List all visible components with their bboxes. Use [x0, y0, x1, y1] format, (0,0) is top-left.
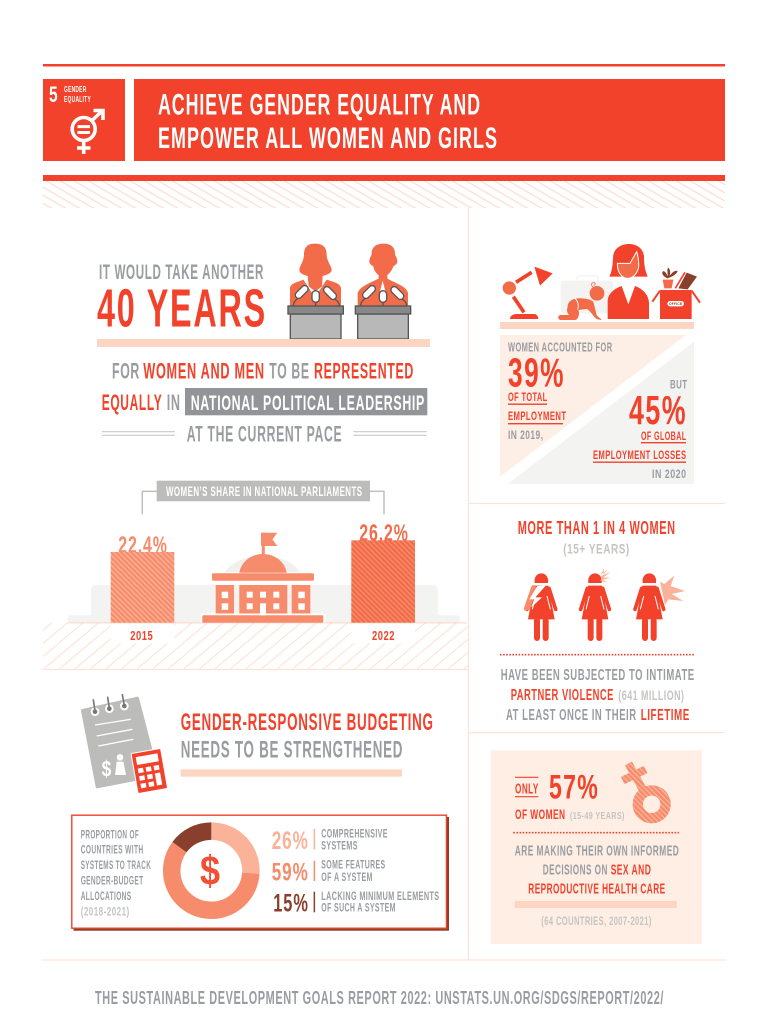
legend: 15%: OF SUCH A SYSTEM: [321, 903, 396, 915]
stat: only 57%: OF WOMEN: [515, 807, 566, 822]
donut chart: [172, 831, 251, 910]
title banner: ACHIEVE GENDER EQUALITY AND: [158, 88, 481, 122]
icon: parliament building: [200, 533, 326, 623]
chart ground: [43, 585, 468, 669]
panel: women and employment: [500, 244, 700, 484]
panel: reproductive health decisions: [491, 750, 702, 944]
statement line 1: REPRESENTED: [314, 358, 414, 384]
source note: (64 COUNTRIES, 2007-2021): [541, 916, 652, 928]
statement: SEX AND: [611, 862, 651, 878]
stat block: 45%: IN 2020: [652, 467, 686, 481]
legend: 15%: 15%: [273, 890, 309, 918]
legend: 26%: [272, 827, 388, 855]
goal name: [64, 84, 91, 104]
card description: PROPORTION OF: [81, 829, 139, 841]
statement line 2: EQUALLY: [102, 390, 162, 415]
dotted divider: [513, 832, 679, 834]
statement line 3: [102, 422, 427, 447]
statement line 1: FOR: [112, 358, 140, 384]
statement line 2: NATIONAL POLITICAL LEADERSHIP: [191, 392, 425, 415]
legend: 59%: OF A SYSTEM: [321, 872, 373, 884]
stat block: 39%: EMPLOYMENT: [508, 409, 566, 423]
statement: (641 MILLION): [618, 688, 684, 703]
bar: 2022: [351, 520, 415, 643]
stat: only 57%: ONLY: [515, 781, 539, 797]
legend: 26%: SYSTEMS: [321, 840, 358, 852]
lead-in text: IT WOULD TAKE ANOTHER: [99, 260, 264, 284]
goal name: GENDER: [64, 84, 86, 94]
statement line 2: [102, 388, 427, 415]
title banner: [134, 79, 725, 161]
icon: notepad and calculator: $: [102, 757, 112, 782]
card description: SYSTEMS TO TRACK: [81, 860, 151, 872]
title banner: EMPOWER ALL WOMEN AND GIRLS: [158, 122, 498, 155]
bar: 2022: 2022: [372, 628, 395, 643]
stat block: 39%: OF TOTAL: [508, 390, 548, 404]
statement line 1: WOMEN AND MEN: [143, 358, 265, 384]
icon: three women figures: [526, 569, 685, 638]
statement: LIFETIME: [641, 707, 690, 724]
stat block: 45%: OF GLOBAL: [641, 429, 686, 443]
panel: women's share in national parliaments: [43, 481, 468, 669]
bar: 2015: [111, 532, 174, 643]
statement: REPRODUCTIVE HEALTH CARE: [528, 881, 666, 897]
chart heading: [142, 481, 384, 514]
icon: desk with lamp, baby, woman and office box: OFFICE: [669, 302, 683, 306]
age note: (15+ YEARS): [563, 540, 630, 556]
stat block: 39%: IN 2019,: [508, 428, 544, 442]
icon: woman and man at podiums: [288, 244, 411, 339]
statement line 2: IN: [167, 390, 181, 415]
divider bar: [97, 339, 430, 347]
legend: 26%: COMPREHENSIVE: [321, 829, 388, 841]
goal name: EQUALITY: [64, 94, 91, 104]
stat block: 45%: [508, 342, 694, 484]
stat block: 39%: WOMEN ACCOUNTED FOR: [508, 341, 612, 355]
stat block: 39%: 39%: [508, 350, 565, 396]
bar: 2022: 26.2%: [359, 520, 409, 547]
icon: gender equality symbol: [72, 110, 103, 154]
card description: ALLOCATIONS: [81, 891, 132, 903]
heading: GENDER-RESPONSIVE BUDGETING: [181, 709, 434, 736]
goal number: 5: [49, 82, 58, 107]
donut chart: $: [200, 847, 222, 894]
statement: PARTNER VIOLENCE: [511, 687, 614, 704]
statement: [515, 844, 679, 897]
dotted divider: [500, 654, 695, 656]
card description: COUNTRIES WITH: [81, 845, 144, 857]
statement: DECISIONS ON: [543, 862, 608, 878]
icon: venus symbol: [623, 764, 666, 818]
card description: GENDER-BUDGET: [81, 875, 144, 887]
statement: [501, 667, 695, 724]
stat block: 45%: 45%: [629, 387, 687, 433]
statement line 3: AT THE CURRENT PACE: [187, 422, 342, 447]
panel: 40 years to political parity: [97, 244, 430, 447]
panel: gender-responsive budgeting: [72, 695, 449, 931]
legend: 59%: SOME FEATURES: [321, 860, 386, 872]
heading: NEEDS TO BE STRENGTHENED: [181, 737, 403, 764]
divider bar: [500, 322, 694, 329]
stat: only 57%: (15-49 YEARS): [570, 810, 625, 822]
card description: [81, 829, 151, 918]
statement: AT LEAST ONCE IN THEIR: [506, 707, 637, 724]
heading: [181, 709, 434, 777]
icon: notepad and calculator: [83, 695, 168, 794]
legend: 15%: LACKING MINIMUM ELEMENTS: [321, 891, 440, 903]
divider bar: [515, 901, 677, 908]
stat: only 57%: 57%: [549, 768, 599, 806]
legend: 59%: 59%: [272, 859, 309, 887]
stat block: 45%: BUT: [670, 378, 688, 392]
legend: 59%: [272, 859, 386, 887]
legend: 26%: 26%: [272, 827, 309, 855]
top rule: [43, 64, 725, 66]
panel: SDG 5 icon: [43, 79, 125, 161]
card: budget systems donut: [72, 815, 449, 931]
bar: 2015: 2015: [130, 628, 153, 643]
stat: only 57%: [515, 768, 625, 822]
statement line 1: TO BE: [269, 358, 310, 384]
stat block: 45%: EMPLOYMENT LOSSES: [593, 448, 686, 462]
stat block: 39%: [500, 335, 686, 477]
big number: 40 YEARS: [97, 278, 267, 338]
bar: 2015: 22.4%: [118, 532, 168, 559]
icon: desk with lamp, baby, woman and office box: [503, 244, 700, 320]
legend: 15%: [273, 890, 440, 918]
card description: (2018-2021): [81, 906, 130, 918]
chart heading: WOMEN’S SHARE IN NATIONAL PARLIAMENTS: [166, 483, 362, 499]
panel: intimate partner violence: [500, 517, 695, 724]
